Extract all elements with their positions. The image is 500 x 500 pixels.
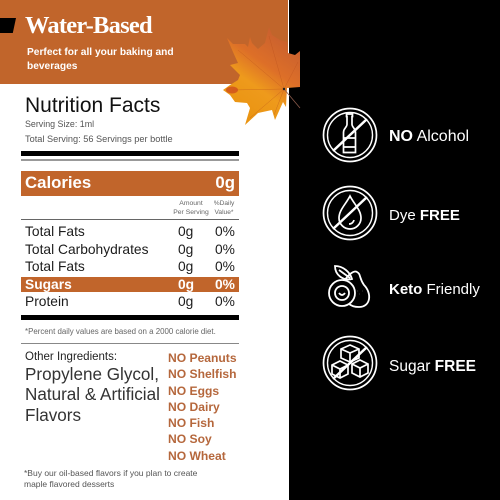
allergen list: NO Eggs — [168, 384, 219, 398]
row: total fats: 0% — [215, 224, 235, 239]
black side panel — [289, 0, 500, 500]
row: protein: 0g — [178, 294, 193, 309]
row: sugars highlighted — [21, 277, 239, 292]
column header: daily value — [214, 200, 234, 216]
header black tab — [0, 18, 16, 33]
panel: nutrition facts title: Nutrition Facts — [25, 94, 160, 117]
ingredients text: Flavors — [25, 406, 81, 425]
serving size: Serving Size: 1ml — [25, 119, 94, 129]
allergen list: NO Soy — [168, 432, 212, 446]
calories label: Calories — [25, 173, 91, 192]
row: protein: 0% — [215, 294, 235, 309]
ingredients text: Natural & Artificial — [25, 385, 160, 404]
row: protein: Protein — [25, 294, 69, 309]
column header: daily value: Value* — [215, 209, 233, 216]
allergen list — [168, 351, 237, 463]
label: Sugar FREE: Sugar FREE — [389, 358, 476, 375]
row: total fats: 0g — [178, 224, 193, 239]
ingredients text: Propylene Glycol, — [25, 365, 159, 384]
row: total fats second: Total Fats — [25, 259, 85, 274]
row: total fats second — [25, 259, 235, 274]
heading: Water-Based: Water-Based — [25, 12, 152, 39]
column header: amount per serving: Per Serving — [173, 209, 209, 216]
footnote: oil-based flavors: *Buy our oil-based flavors if you plan to create — [24, 468, 197, 478]
column header: amount per serving: Amount — [179, 200, 203, 207]
allergen list: NO Dairy — [168, 400, 220, 414]
ingredients text — [25, 365, 160, 425]
allergen list: NO Shelfish — [168, 367, 237, 381]
allergen list: NO Wheat — [168, 449, 226, 463]
other ingredients label: Other Ingredients: — [25, 351, 117, 363]
column header: amount per serving — [173, 200, 209, 216]
row: total carbohydrates: 0g — [178, 242, 193, 257]
row: total carbohydrates: Total Carbohydrates — [25, 242, 148, 257]
footnote: oil-based flavors — [24, 468, 197, 489]
footnote: daily values: *Percent daily values are based on a 2000 calorie diet. — [25, 327, 216, 336]
icon: sugar free — [322, 336, 378, 390]
calories value: 0g — [215, 173, 235, 192]
subheading: Perfect for all your baking and beverages — [27, 47, 174, 72]
row: sugars highlighted: 0% — [215, 277, 235, 292]
row: total fats: Total Fats — [25, 224, 85, 239]
row: total carbohydrates — [25, 242, 235, 257]
footnote: oil-based flavors: maple flavored desserts — [24, 479, 114, 489]
row: protein — [25, 294, 235, 309]
icon: dye free — [322, 186, 378, 240]
row: sugars highlighted: Sugars — [25, 277, 72, 292]
label: Keto Friendly: Keto Friendly — [389, 281, 480, 298]
column header: daily value: %Daily — [214, 200, 234, 207]
row: total carbohydrates: 0% — [215, 242, 235, 257]
row: total fats second: 0% — [215, 259, 235, 274]
calories bar — [21, 171, 239, 196]
icon: no alcohol — [322, 108, 378, 162]
total serving: Total Serving: 56 Servings per bottle — [25, 134, 173, 144]
allergen list: NO Peanuts — [168, 351, 237, 365]
icon: keto avocado — [328, 265, 370, 308]
row: sugars highlighted: 0g — [178, 277, 194, 292]
allergen list: NO Fish — [168, 416, 214, 430]
label: NO Alcohol: NO Alcohol — [389, 128, 469, 145]
label: Dye FREE: Dye FREE — [389, 207, 460, 224]
header banner — [0, 0, 288, 84]
row: total fats — [25, 224, 235, 239]
row: total fats second: 0g — [178, 259, 193, 274]
